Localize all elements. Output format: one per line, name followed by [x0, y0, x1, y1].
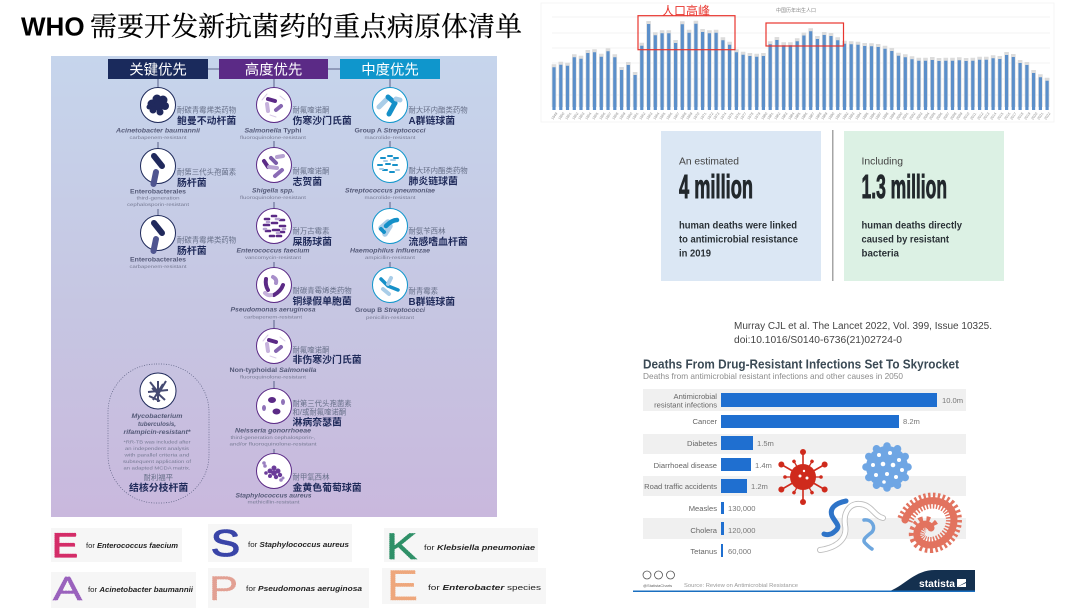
- pathogen: Neisseria gonorrhoeae: 淋病奈瑟菌: [292, 416, 342, 428]
- tile: E for Enterococcus faecium: [51, 527, 182, 565]
- pathogen: Streptococcus pneumoniae: macrolide-resistant: [364, 195, 416, 201]
- year axis labels: 1955: [592, 112, 599, 121]
- chart: deaths from drug-resistant infections: [633, 358, 975, 592]
- year axis labels: 1972: [707, 112, 714, 121]
- year axis labels: 2007: [943, 112, 950, 121]
- pathogen: Salmonella Typhi: fluoroquinolone-resistant: [240, 135, 307, 141]
- pathogen: Group A Streptococci: 耐大环内酯类药物: [408, 106, 468, 114]
- tile: S for Staphylococcus aureus: [208, 523, 352, 564]
- callout: tuberculosis: an adapted MCDA matrix.: [124, 466, 190, 472]
- pathogen: Pseudomonas aeruginosa: Pseudomonas aeruginosa: [230, 306, 316, 314]
- year axis labels: 2006: [936, 112, 943, 121]
- year axis labels: 2013: [983, 112, 990, 121]
- legend: ESKAPE pathogens: [51, 523, 546, 608]
- bars: [554, 24, 1047, 110]
- pathogen: Enterococcus faecium: [236, 208, 332, 261]
- year axis labels: 1971: [700, 112, 707, 121]
- pathogen: Acinetobacter baumannii: carbapenem-resistant: [130, 135, 187, 141]
- year axis labels: 1953: [578, 112, 585, 121]
- pathogen: Staphylococcus aureus: 金黄色葡萄球菌: [292, 481, 362, 494]
- pathogen: Haemophilus influenzae: 流感嗜血杆菌: [408, 235, 468, 248]
- year axis labels: [551, 112, 1051, 121]
- category labels: Antimicrobial: [674, 392, 717, 401]
- icon: light chain inner: [820, 504, 883, 550]
- year axis labels: 1995: [862, 112, 869, 121]
- callout: tuberculosis: with parallel criteria and: [124, 452, 190, 458]
- pathogen: Enterococcus faecium: 屎肠球菌: [292, 235, 332, 248]
- callout: tuberculosis: Mycobacterium: [132, 413, 183, 420]
- tile: K for Klebsiella pneumoniae: [384, 526, 538, 567]
- year axis labels: 1951: [565, 112, 572, 121]
- pathogen: Neisseria gonorrhoeae: [230, 388, 352, 448]
- tile: A for Acinetobacter baumannii: A: [53, 570, 82, 607]
- pathogen: Enterobacterales carbapenem: 耐碳青霉烯类药物: [177, 236, 237, 244]
- year axis labels: 1992: [842, 112, 849, 121]
- tile: P for Pseudomonas aeruginosa: [208, 568, 369, 608]
- footer: license and source: @StatistaCharts: [643, 583, 672, 588]
- tile: E for Enterobacter species: for Enterobacter species: [428, 583, 541, 592]
- chart heading: [643, 358, 960, 381]
- icon: blue rod bacterium: [824, 501, 846, 535]
- callout: tuberculosis: *RR-TB was included after: [124, 440, 191, 446]
- pathogen: Pseudomonas aeruginosa: 铜绿假单胞菌: [292, 294, 352, 308]
- tile: E for Enterococcus faecium: E: [52, 527, 78, 565]
- pathogen: Salmonella Typhi: 伤寒沙门氏菌: [292, 114, 352, 127]
- year axis labels: 2009: [956, 112, 963, 121]
- pathogen: Enterococcus faecium: Enterococcus faecium: [236, 248, 310, 254]
- value labels: 60,000: [728, 547, 751, 556]
- pathogen: Neisseria gonorrhoeae: and/or fluoroquinolone-resistant: [230, 442, 317, 448]
- year axis labels: 1996: [869, 112, 876, 121]
- year axis labels: 2005: [929, 112, 936, 121]
- heading: medium priority: 中度优先: [361, 62, 419, 78]
- year axis labels: 1984: [788, 112, 795, 121]
- year axis labels: 2002: [909, 112, 916, 121]
- category labels: Cholera: [690, 526, 718, 535]
- category labels: Measles: [689, 504, 717, 513]
- year axis labels: 2020: [1031, 112, 1038, 121]
- value labels: [728, 396, 963, 556]
- pathogen: Enterobacterales carbapenem: [130, 216, 237, 270]
- year axis labels: 2016: [1004, 112, 1011, 121]
- footer: license and source: [643, 571, 798, 589]
- panel: 1.3 million deaths: 1.3 million: [862, 168, 947, 205]
- year axis labels: 2012: [977, 112, 984, 121]
- value labels: 1.5m: [757, 439, 774, 448]
- icon: white chain bacterium: [820, 504, 883, 550]
- year axis labels: 1973: [713, 112, 720, 121]
- panel: 1.3 million deaths: caused by resistant: [862, 234, 950, 246]
- pathogen: Enterococcus faecium: 耐万古霉素: [292, 226, 330, 236]
- pathogen: Salmonella Typhi: Salmonella Typhi: [244, 128, 302, 134]
- category labels: Cancer: [693, 417, 717, 426]
- category labels: Road traffic accidents: [644, 482, 717, 491]
- year axis labels: 1987: [808, 112, 815, 121]
- pathogen: Enterococcus faecium: vancomycin-resistant: [245, 255, 302, 261]
- title: WHO: [21, 12, 85, 42]
- pathogen: Shigella: 耐氟喹诺酮: [292, 166, 329, 176]
- year axis labels: 1968: [680, 112, 687, 121]
- panel: 4 million deaths: to antimicrobial resistance: [679, 234, 798, 246]
- value labels: 10.0m: [942, 396, 963, 405]
- year axis labels: 1977: [740, 112, 747, 121]
- pathogen: Shigella: 志贺菌: [292, 175, 322, 188]
- pathogen: Group A Streptococci: macrolide-resistant: [364, 135, 416, 141]
- pathogen: Streptococcus pneumoniae: 耐大环内酯类药物: [408, 166, 468, 175]
- year axis labels: 1976: [734, 112, 741, 121]
- pathogen: Neisseria gonorrhoeae: 耐第三代头孢菌素: [292, 399, 352, 408]
- year axis labels: 1954: [585, 112, 592, 121]
- year axis labels: 1981: [767, 112, 774, 121]
- chart heading: Deaths From Drug-Resistant Infections Set To Skyrocket: [643, 358, 960, 372]
- pathogen: Non-typhoidal Salmonella: Non-typhoidal Salmonella: [230, 367, 317, 374]
- panel: 1.3 million deaths: Including: [862, 156, 903, 168]
- year axis labels: 2014: [990, 112, 997, 121]
- year axis labels: 1985: [794, 112, 801, 121]
- tile: P for Pseudomonas aeruginosa: P: [209, 570, 238, 608]
- category labels: [644, 392, 718, 556]
- panel: 4 million deaths: 4 million: [679, 168, 753, 205]
- pathogen: Pseudomonas aeruginosa: carbapenem-resistant: [244, 314, 303, 320]
- pathogen: Enterobacterales carbapenem: 肠杆菌: [177, 244, 207, 257]
- pathogen: Salmonella Typhi: 耐氟喹诺酮: [292, 106, 329, 114]
- tile: E for Enterobacter species: [382, 562, 546, 608]
- year axis labels: 1994: [855, 112, 862, 121]
- year axis labels: 1960: [626, 112, 633, 121]
- panel: 1.3 million deaths: human deaths directly: [862, 220, 962, 232]
- year axis labels: 1970: [693, 112, 700, 121]
- category labels: Diabetes: [687, 439, 717, 448]
- icon: light blue spiral bacterium: [864, 520, 874, 549]
- icon: red virus: [777, 449, 829, 505]
- heading: high priority: 高度优先: [245, 62, 302, 78]
- year axis labels: 1988: [815, 112, 822, 121]
- pathogen: Staphylococcus aureus: 耐甲氧西林: [292, 472, 330, 482]
- tile: P for Pseudomonas aeruginosa: for Pseudomonas aeruginosa: [246, 584, 362, 593]
- pathogen: Acinetobacter baumannii: Acinetobacter baumannii: [115, 128, 200, 134]
- year axis labels: 1999: [889, 112, 896, 121]
- panel: 1.3 million deaths: bacteria: [862, 248, 899, 260]
- pathogen: Group B Streptococci: penicillin-resistant: [366, 315, 415, 321]
- bar chart: births per year: [541, 3, 1054, 122]
- value labels: 1.4m: [755, 461, 772, 470]
- logo band: statista: [633, 570, 975, 592]
- tile: K for Klebsiella pneumoniae: for Klebsiella pneumoniae: [424, 543, 536, 552]
- pathogen: Staphylococcus aureus: methicillin-resistant: [248, 500, 300, 506]
- callout: tuberculosis: rifampicin-resistant*: [124, 429, 191, 436]
- value labels: 1.2m: [751, 482, 768, 491]
- chart title: 中国历年出生人口: [776, 7, 816, 14]
- panel: WHO priority pathogens: [51, 56, 497, 517]
- year axis labels: 1982: [774, 112, 781, 121]
- pathogen: Group B Streptococci: B群链球菌: [408, 295, 455, 308]
- pathogen: Group A Streptococci: [354, 88, 468, 141]
- value labels: 130,000: [728, 504, 755, 513]
- pathogen: Enterobacterales third-generation: Enterobacterales: [130, 188, 186, 196]
- pathogen: Staphylococcus aureus: [236, 454, 362, 506]
- year axis labels: 1964: [653, 112, 660, 121]
- pathogen: Shigella: fluoroquinolone-resistant: [240, 195, 307, 201]
- pathogen: Acinetobacter baumannii: 耐碳青霉烯类药物: [177, 106, 237, 114]
- tile: S for Staphylococcus aureus: S: [211, 523, 240, 564]
- panel: 1.3 million deaths: [844, 131, 1004, 281]
- tile: K for Klebsiella pneumoniae: K: [386, 526, 417, 567]
- icon: salmon centipede: [905, 501, 954, 545]
- pathogen: Shigella: [240, 148, 329, 201]
- callout: tuberculosis: 结核分枝杆菌: [129, 481, 188, 494]
- year axis labels: 2010: [963, 112, 970, 121]
- pathogen: Non-typhoidal Salmonella: 非伤寒沙门氏菌: [292, 353, 362, 366]
- pathogen: Streptococcus pneumoniae: Streptococcus pneumoniae: [345, 188, 435, 194]
- year axis labels: 1989: [821, 112, 828, 121]
- year axis labels: 2004: [923, 112, 930, 121]
- year axis labels: 2018: [1017, 112, 1024, 121]
- pathogen: Enterobacterales third-generation: third-generation: [136, 196, 180, 202]
- category labels: Tetanus: [690, 547, 717, 556]
- year axis labels: 1961: [632, 112, 639, 121]
- year axis labels: 2015: [997, 112, 1004, 121]
- pathogen: Non-typhoidal Salmonella: fluoroquinolone-resistant: [240, 374, 307, 380]
- callout: tuberculosis: 耐利福平: [144, 473, 173, 482]
- year axis labels: 1979: [754, 112, 761, 121]
- year axis labels: 1993: [848, 112, 855, 121]
- highlight: first population peak: [638, 3, 735, 50]
- year axis labels: 1950: [558, 112, 565, 121]
- pathogen: Salmonella Typhi: [240, 88, 352, 141]
- year axis labels: 2011: [970, 112, 977, 121]
- value label band: [554, 21, 1047, 107]
- pathogen: Non-typhoidal Salmonella: 耐氟喹诺酮: [292, 346, 329, 354]
- pathogen: Enterobacterales third-generation: 肠杆菌: [177, 176, 207, 189]
- heading: medium priority: [340, 59, 440, 79]
- year axis labels: 1998: [882, 112, 889, 121]
- year axis labels: 1958: [612, 112, 619, 121]
- year axis labels: 2001: [902, 112, 909, 121]
- year axis labels: 1986: [801, 112, 808, 121]
- panel: 4 million deaths: in 2019: [679, 248, 711, 260]
- pathogen: Haemophilus influenzae: Haemophilus influenzae: [350, 248, 430, 254]
- icon: blue virus: [862, 442, 912, 492]
- year axis labels: 1963: [646, 112, 653, 121]
- pathogen: Non-typhoidal Salmonella: [230, 328, 362, 380]
- pathogen: Enterobacterales carbapenem: Enterobacterales: [130, 256, 186, 264]
- pathogen: Pseudomonas aeruginosa: 耐碳青霉烯类药物: [292, 286, 352, 295]
- tile: E for Enterococcus faecium: for Enterococcus faecium: [86, 541, 178, 550]
- pathogen: Acinetobacter baumannii: [115, 88, 237, 141]
- category labels: resistant infections: [654, 400, 717, 410]
- pathogen: Haemophilus influenzae: 耐氨苄西林: [408, 226, 446, 236]
- pathogen: Streptococcus pneumoniae: 肺炎链球菌: [408, 174, 458, 188]
- year axis labels: 1959: [619, 112, 626, 121]
- pathogen: Enterobacterales carbapenem: carbapenem-resistant: [130, 264, 187, 270]
- year axis labels: 2008: [950, 112, 957, 121]
- pathogen: Neisseria gonorrhoeae: Neisseria gonorrhoeae: [235, 428, 311, 434]
- year axis labels: 1983: [781, 112, 788, 121]
- citation: doi:10.1016/S0140-6736(21)02724-0: [734, 335, 902, 346]
- pathogen: Acinetobacter baumannii: 鲍曼不动杆菌: [177, 114, 236, 127]
- value labels: 120,000: [728, 526, 755, 535]
- pathogen: Staphylococcus aureus: Staphylococcus aureus: [236, 492, 312, 500]
- pathogen: Neisseria gonorrhoeae: third-generation cephalosporin-,: [230, 435, 316, 441]
- heading: high priority: [219, 59, 328, 79]
- callout: tuberculosis: an independent analysis: [125, 446, 190, 452]
- year axis labels: 2017: [1010, 112, 1017, 121]
- pathogen: Haemophilus influenzae: [350, 208, 468, 261]
- tile: A for Acinetobacter baumannii: [51, 570, 196, 608]
- pathogen: Enterobacterales third-generation: 耐第三代头孢菌素: [177, 168, 237, 176]
- year axis labels: 1949: [551, 112, 558, 121]
- pathogen: Enterobacterales third-generation: [127, 148, 237, 208]
- pathogen: Pseudomonas aeruginosa: [230, 268, 352, 320]
- year axis labels: 1967: [673, 112, 680, 121]
- panel: 4 million deaths: [661, 131, 821, 281]
- logo band: statista: statista: [919, 578, 955, 590]
- year axis labels: 1991: [835, 112, 842, 121]
- pathogen: Group A Streptococci: Group A Streptococci: [354, 128, 426, 134]
- callout: tuberculosis: subsequent application of: [123, 459, 192, 465]
- pathogen: Group B Streptococci: Group B Streptococci: [355, 307, 425, 314]
- panel: 4 million deaths: An estimated: [679, 156, 739, 168]
- citation: Murray CJL et al. The Lancet 2022, Vol. 399, Issue 10325.: [734, 321, 992, 332]
- highlight: second population peak: [766, 23, 844, 46]
- title: 需要开发新抗菌药的重点病原体清单: [90, 12, 522, 42]
- value labels: 8.2m: [903, 417, 920, 426]
- year axis labels: 1980: [761, 112, 768, 121]
- year axis labels: 2021: [1037, 112, 1044, 121]
- callout: tuberculosis: tuberculosis,: [138, 421, 176, 428]
- year axis labels: 1990: [828, 112, 835, 121]
- year axis labels: 2019: [1024, 112, 1031, 121]
- highlight: first population peak: 人口高峰: [662, 3, 710, 18]
- heading: critical priority: 关键优先: [129, 62, 187, 78]
- callout: tuberculosis: [108, 364, 209, 503]
- chart heading: Deaths from antimicrobial resistant infections and other causes in 2050: [643, 371, 903, 381]
- category labels: Diarrhoeal disease: [654, 461, 717, 470]
- heading: critical priority: [108, 59, 208, 79]
- year axis labels: 2000: [896, 112, 903, 121]
- pathogen: Neisseria gonorrhoeae: 和/或耐氟喹诺酮: [292, 408, 346, 416]
- pathogen: Group B Streptococci: 耐青霉素: [408, 286, 439, 296]
- year axis labels: 2003: [916, 112, 923, 121]
- pathogen: Enterobacterales third-generation: cephalosporin-resistant: [127, 202, 190, 208]
- year axis labels: 1969: [686, 112, 693, 121]
- year axis labels: 1978: [747, 112, 754, 121]
- year axis labels: 1974: [720, 112, 727, 121]
- citation: [734, 321, 992, 346]
- year axis labels: 1965: [659, 112, 666, 121]
- year axis labels: 1966: [666, 112, 673, 121]
- year axis labels: 1956: [599, 112, 606, 121]
- pathogen: Shigella: Shigella spp.: [252, 188, 294, 194]
- tile: A for Acinetobacter baumannii: for Acinetobacter baumannii: [88, 585, 194, 594]
- year axis labels: 1975: [727, 112, 734, 121]
- bars: [721, 393, 937, 557]
- year axis labels: 1952: [572, 112, 579, 121]
- tile: S for Staphylococcus aureus: for Staphylococcus aureus: [248, 540, 349, 549]
- pathogen: Streptococcus pneumoniae: [345, 148, 468, 201]
- year axis labels: 1962: [639, 112, 646, 121]
- pathogen: Haemophilus influenzae: ampicillin-resistant: [365, 255, 416, 261]
- year axis labels: 1957: [605, 112, 612, 121]
- pathogen: Group A Streptococci: A群链球菌: [408, 114, 455, 127]
- footer: license and source: Source: Review on Antimicrobial Resistance: [684, 583, 798, 589]
- year axis labels: 2022: [1044, 112, 1051, 121]
- panel: 4 million deaths: human deaths were linked: [679, 220, 797, 232]
- pathogen: Group B Streptococci: [355, 268, 455, 321]
- year axis labels: 1997: [875, 112, 882, 121]
